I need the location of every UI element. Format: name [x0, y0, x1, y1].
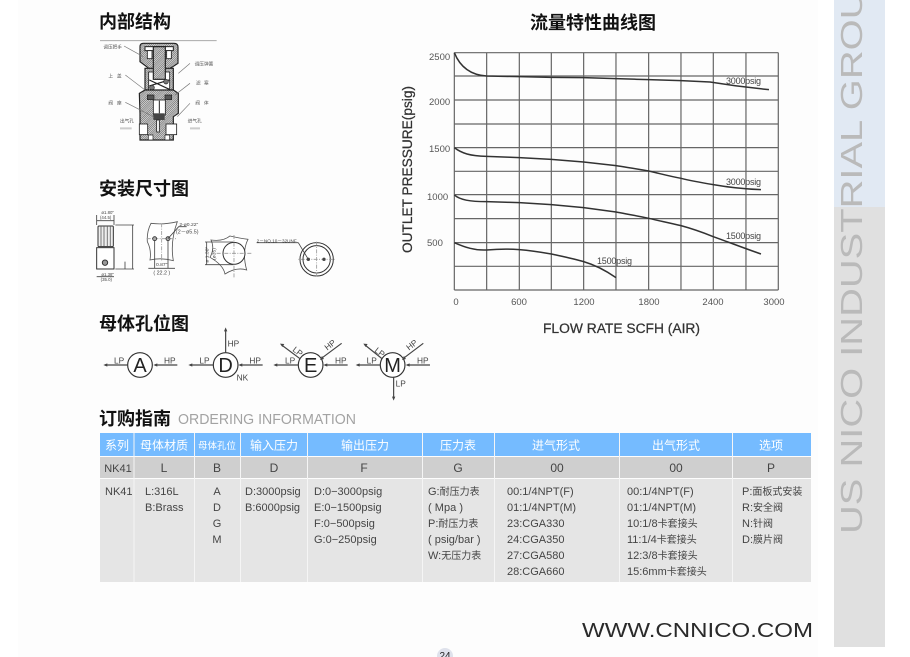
- diagram: internal structure cross-section: 阀体: [195, 100, 209, 107]
- table backgrounds: [100, 433, 811, 582]
- chart curves: [454, 53, 769, 278]
- table options row: P:面板式安装: [742, 485, 802, 498]
- table code row: D: [270, 461, 279, 475]
- table header row: 进气形式: [532, 438, 580, 452]
- port D: D: [218, 355, 233, 377]
- port M: [356, 337, 430, 401]
- table options row: D:膜片阀: [742, 533, 783, 546]
- diagram: internal structure cross-section: 阀座: [108, 100, 122, 107]
- table options row: M: [212, 534, 222, 546]
- port A: A: [133, 355, 147, 377]
- diagram: internal structure cross-section: 上盖: [108, 72, 122, 78]
- port M: LP: [396, 379, 406, 389]
- rear thread view: 2－NO.10－32UNF: [257, 239, 297, 244]
- diagram: internal structure cross-section: 调压把手: [103, 44, 122, 51]
- table options row: G:0−250psig: [314, 534, 377, 546]
- chart curve labels: 3000psig: [726, 177, 761, 187]
- diagram: internal structure cross-section: [100, 41, 217, 140]
- table options row: E:0−1500psig: [314, 502, 382, 514]
- table options row: 15:6mm卡套接头: [627, 565, 707, 578]
- table options row: 12:3/8卡套接头: [627, 549, 698, 562]
- heading: body port configuration: 母体孔位图: [99, 313, 189, 334]
- table code row: P: [767, 461, 775, 475]
- port E: [273, 337, 348, 377]
- table options row: B:Brass: [145, 502, 184, 514]
- table options row: 24:CGA350: [507, 534, 564, 546]
- table options row: D: [213, 502, 221, 514]
- port M: LP: [373, 345, 387, 359]
- port M: HP: [417, 355, 429, 365]
- table: ordering information: [100, 433, 811, 582]
- table options row: ( psig/bar ): [428, 534, 481, 546]
- chart curve labels: [597, 76, 761, 266]
- table options row: 00:1/4NPT(F): [507, 486, 574, 498]
- port E: LP: [285, 355, 296, 365]
- diagram: port configurations: [103, 327, 430, 401]
- chart: flow characteristic curves: [400, 52, 785, 336]
- port A: HP: [164, 355, 176, 365]
- port M: M: [384, 355, 401, 377]
- mounting hole view: 2-ø0.22": [179, 222, 199, 228]
- port D: NK: [237, 372, 249, 382]
- chart grid: [454, 53, 778, 290]
- port D: LP: [199, 355, 210, 365]
- table options row: D:3000psig: [245, 486, 301, 498]
- table header row: [105, 438, 783, 452]
- table options row: [105, 485, 802, 578]
- chart y-axis ticks: 2500: [429, 52, 450, 63]
- side view of regulator: [97, 210, 134, 282]
- rear thread view: [257, 239, 335, 277]
- panel hole view: [204, 235, 251, 277]
- sidebar: brand strip: [834, 0, 885, 647]
- table options row: F:0−500psig: [314, 518, 375, 530]
- diagram: installation dimension drawings: [97, 210, 335, 282]
- table options row: A: [213, 486, 221, 498]
- port D: HP: [249, 355, 261, 365]
- heading: ordering guide: 订购指南: [99, 408, 171, 429]
- table options row: W:无压力表: [428, 549, 481, 562]
- chart x-axis ticks: 2400: [702, 297, 724, 308]
- diagram: internal structure cross-section: 滤塞: [196, 80, 209, 87]
- table header row: 系列: [105, 438, 129, 452]
- chart x-axis ticks: 1200: [573, 297, 595, 308]
- table code row: [104, 461, 775, 475]
- table code row: G: [453, 461, 463, 475]
- table options row: N:针阀: [742, 517, 773, 530]
- chart x-axis ticks: 0: [453, 297, 459, 308]
- port A: [103, 353, 177, 377]
- table header row: 输入压力: [250, 438, 298, 452]
- diagram: internal structure cross-section: 出气孔: [120, 117, 134, 124]
- chart x-axis title: FLOW RATE SCFH (AIR): [543, 321, 700, 336]
- table code row: 00: [669, 461, 683, 475]
- side view of regulator: (35.0): [101, 277, 113, 282]
- page number: [437, 648, 453, 657]
- port D: HP: [228, 339, 240, 349]
- table header row: 母体孔位: [198, 440, 236, 452]
- chart x-axis ticks: 1800: [638, 297, 660, 308]
- mounting hole view: (2－ø5.5): [176, 229, 199, 235]
- table code row: 00: [550, 461, 564, 475]
- chart x-axis ticks: 600: [511, 297, 527, 308]
- port D: [188, 327, 263, 382]
- port M: HP: [404, 337, 420, 352]
- table options row: P:耐压力表: [428, 517, 478, 530]
- table options row: G:耐压力表: [428, 485, 480, 498]
- table options row: 10:1/8卡套接头: [627, 517, 698, 530]
- chart y-axis ticks: 2000: [429, 97, 450, 108]
- table code row: NK41: [104, 463, 132, 475]
- diagram: internal structure cross-section: 进气孔: [188, 117, 202, 124]
- chart y-axis title: OUTLET PRESSURE(psig): [400, 86, 415, 253]
- chart y-axis ticks: 500: [427, 238, 443, 249]
- mounting hole view: [147, 222, 199, 277]
- chart x-axis ticks: [453, 297, 785, 308]
- heading: internal structure: 内部结构: [99, 11, 171, 32]
- table options row: 27:CGA580: [507, 550, 564, 562]
- heading: installation dimensions: 安装尺寸图: [99, 179, 189, 199]
- table header row: 选项: [759, 438, 783, 452]
- chart curve labels: 3000psig: [726, 76, 761, 86]
- port A: LP: [114, 355, 125, 365]
- chart curve labels: 1500psig: [726, 231, 761, 241]
- table options row: G: [213, 518, 221, 530]
- port E: HP: [322, 337, 338, 352]
- table code row: F: [360, 461, 368, 475]
- sidebar: brand strip: US NICO INDUSTRIAL GROUP: [834, 0, 869, 534]
- table header row: 母体材质: [140, 438, 188, 452]
- table header row: 出气形式: [652, 438, 700, 452]
- table options row: ( Mpa ): [428, 502, 463, 514]
- chart y-axis ticks: 1000: [427, 192, 448, 203]
- table options row: 01:1/4NPT(M): [507, 502, 576, 514]
- chart x-axis ticks: 3000: [763, 297, 785, 308]
- port E: LP: [291, 344, 305, 359]
- table options row: 23:CGA330: [507, 518, 564, 530]
- heading: ordering guide: ORDERING INFORMATION: [178, 411, 356, 428]
- table options row: R:安全阀: [742, 501, 783, 514]
- table options row: B:6000psig: [245, 502, 300, 514]
- port M: LP: [367, 355, 377, 365]
- panel hole view: ø 1.38": [204, 247, 210, 263]
- side view of regulator: ø1.38": [101, 272, 114, 277]
- table options row: 01:1/4NPT(M): [627, 502, 696, 514]
- mounting hole view: 0.87": [156, 262, 168, 268]
- table header row: 输出压力: [341, 438, 389, 452]
- table options row: 11:1/4卡套接头: [627, 533, 697, 546]
- table options row: 00:1/4NPT(F): [627, 486, 694, 498]
- table code row: L: [161, 461, 168, 475]
- side view of regulator: (44.5): [100, 215, 112, 220]
- port E: E: [304, 355, 317, 377]
- port E: HP: [335, 355, 347, 365]
- mounting hole view: ( 22.2 ): [153, 271, 170, 277]
- heading: ordering guide: [99, 408, 356, 429]
- chart y-axis ticks: [427, 52, 450, 249]
- table code row: B: [213, 461, 221, 475]
- table header row: 压力表: [440, 438, 476, 452]
- side view of regulator: ø1.80": [101, 210, 114, 215]
- heading: flow characteristic curves: 流量特性曲线图: [530, 13, 656, 33]
- website address: WWW.CNNICO.COM: [582, 620, 813, 642]
- diagram: internal structure cross-section: 调压弹簧: [195, 60, 214, 67]
- panel hole view: (ø35): [211, 248, 217, 260]
- table options row: 28:CGA660: [507, 566, 564, 578]
- table options row: NK41: [105, 486, 133, 498]
- chart y-axis ticks: 1500: [429, 144, 450, 155]
- table options row: L:316L: [145, 486, 179, 498]
- chart curve labels: 1500psig: [597, 256, 632, 266]
- table options row: D:0−3000psig: [314, 486, 382, 498]
